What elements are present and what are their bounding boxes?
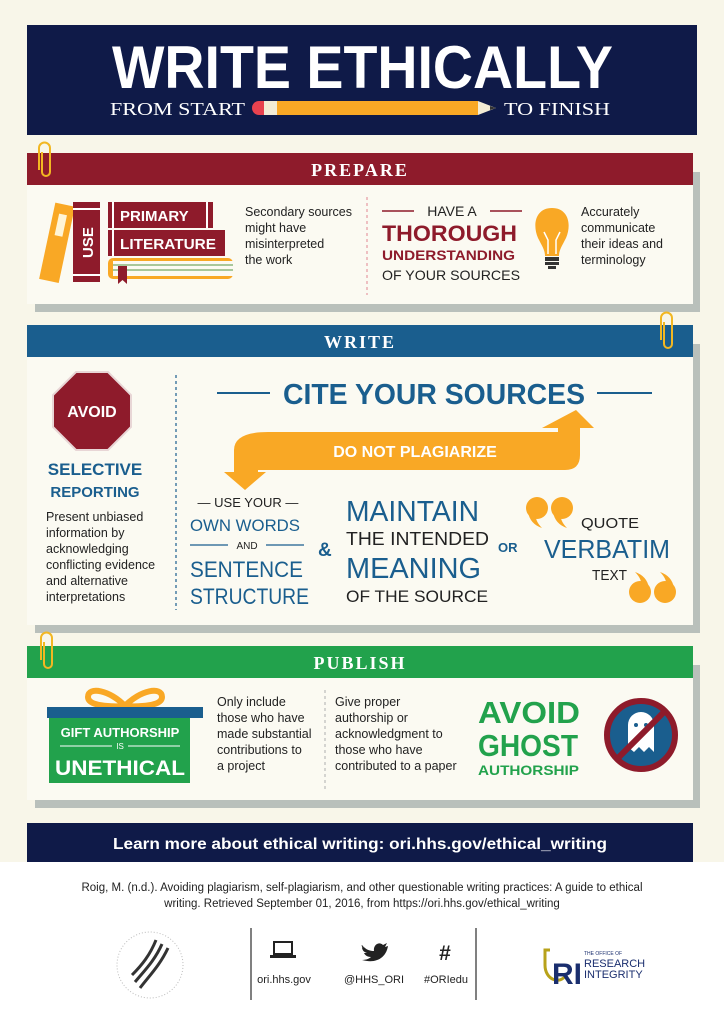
banner: learn more: Learn more about ethical writing: ori.hhs.gov/ethical_writing [113,836,607,853]
icon: books [39,202,233,284]
text: quote verbatim [526,497,676,603]
footer: hashtag: # [439,942,451,965]
subtitle right: TO FINISH [504,99,610,119]
text: quote verbatim: VERBATIM [544,534,670,564]
text: thorough understanding [382,203,522,283]
footer: hashtag: #ORIedu [424,974,468,986]
panel: publish [27,632,700,808]
text: accurately communicate: communicate [581,221,655,235]
text: thorough understanding: HAVE A [427,203,477,219]
text: accurately communicate: terminology [581,253,646,267]
text: or: OR [498,540,518,555]
icon: books: LITERATURE [120,236,216,253]
icon: stop sign avoid: AVOID [67,404,117,421]
text: avoid ghost authorship: GHOST [478,728,578,763]
text: quote verbatim: QUOTE [581,515,639,532]
text: secondary sources: the work [245,253,293,267]
text: secondary sources: Secondary sources [245,205,352,219]
banner: learn more [27,823,693,862]
text: use your own words: SENTENCE [190,557,303,582]
icon: gift box: IS [116,742,124,751]
text: thorough understanding: THOROUGH [382,221,517,246]
text: use your own words: STRUCTURE [190,584,309,609]
text: secondary sources: misinterpreted [245,237,324,251]
panel: write [27,312,700,633]
panel: prepare [27,143,700,312]
text: only include: contributions to [217,743,302,757]
arrow: do not plagiarize: DO NOT PLAGIARIZE [333,444,497,461]
icon: paperclip [41,632,52,668]
text: selective reporting: and alternative [46,574,128,588]
text: avoid ghost authorship [478,695,580,778]
footer: twitter: @HHS_ORI [344,974,404,986]
text: selective reporting: REPORTING [50,484,140,501]
footer: twitter [344,943,404,986]
icon: gift box [47,691,203,783]
heading: prepare: PREPARE [311,160,409,180]
text: thorough understanding: UNDERSTANDING [382,247,515,263]
text: secondary sources: might have [245,221,306,235]
text: selective reporting: SELECTIVE [48,460,142,479]
icon: paperclip [661,312,672,348]
subtitle left: FROM START [110,99,245,119]
text: selective reporting: Present unbiased [46,510,143,524]
icon: ori logo: RI [552,958,582,991]
text: selective reporting [46,460,155,604]
text: give proper authorship: Give proper [335,695,400,709]
heading: publish: PUBLISH [313,653,407,673]
title banner [27,25,697,135]
text: give proper authorship: those who have [335,743,423,757]
icon: stop sign avoid [53,372,131,450]
text: citation: Roig, M. (n.d.). Avoiding plagiarism, self-plagiarism, and other questionable writing practices: A guide to ethical [81,882,643,894]
text: maintain meaning: OF THE SOURCE [346,587,488,606]
text: maintain meaning: THE INTENDED [346,529,489,549]
icon: ori logo: RESEARCH [584,958,645,970]
icon: paperclip [39,143,50,176]
text: maintain meaning: MAINTAIN [346,496,479,528]
text: use your own words: — USE YOUR — [198,495,298,510]
text: only include: those who have [217,711,305,725]
text: avoid ghost authorship: AVOID [478,695,580,730]
text: avoid ghost authorship: AUTHORSHIP [478,762,579,778]
text: thorough understanding: OF YOUR SOURCES [382,267,520,283]
text: use your own words: OWN WORDS [190,516,300,535]
icon: no ghost [607,701,675,769]
icon: light bulb [535,208,569,269]
text: use your own words [190,495,309,609]
title: WRITE ETHICALLY [112,34,613,101]
text: give proper authorship: authorship or [335,711,408,725]
heading: write [27,325,693,357]
icon: hhs logo [117,932,183,998]
icon: books: PRIMARY [120,208,189,225]
footer: website: ori.hhs.gov [257,974,311,986]
text: use your own words: AND [236,541,258,552]
footer: website [257,942,311,986]
text: maintain meaning: MEANING [346,553,481,585]
arrow: do not plagiarize [224,410,594,490]
icon: gift box: UNETHICAL [55,757,185,780]
heading: cite your sources: CITE YOUR SOURCES [283,379,585,411]
text: give proper authorship: contributed to a paper [335,759,457,773]
text: selective reporting: acknowledging [46,542,129,556]
icon: ori logo [545,950,645,991]
text: only include: made substantial [217,727,312,741]
text: citation: writing. Retrieved September 01, 2016, from https://ori.hhs.gov/ethical_writing [163,898,560,910]
text: selective reporting: conflicting evidence [46,558,155,572]
icon: books: USE [80,227,97,258]
heading: prepare [27,153,693,185]
text: give proper authorship: acknowledgment to [335,727,443,741]
icon: gift box: GIFT AUTHORSHIP [61,725,180,740]
text: selective reporting: information by [46,526,125,540]
heading: write: WRITE [324,332,396,352]
text: selective reporting: interpretations [46,590,125,604]
icon: ori logo: INTEGRITY [584,969,643,981]
icon: ori logo: THE OFFICE OF [584,951,622,957]
text: ampersand: & [318,540,332,561]
text: only include: a project [217,759,265,773]
text: accurately communicate: their ideas and [581,237,663,251]
text: accurately communicate: Accurately [581,205,640,219]
text: only include: Only include [217,695,286,709]
text: maintain meaning [346,496,489,606]
heading: publish [27,646,693,678]
footer: hashtag [424,942,468,986]
icon: pencil [252,101,496,115]
text: quote verbatim: TEXT [592,567,627,584]
